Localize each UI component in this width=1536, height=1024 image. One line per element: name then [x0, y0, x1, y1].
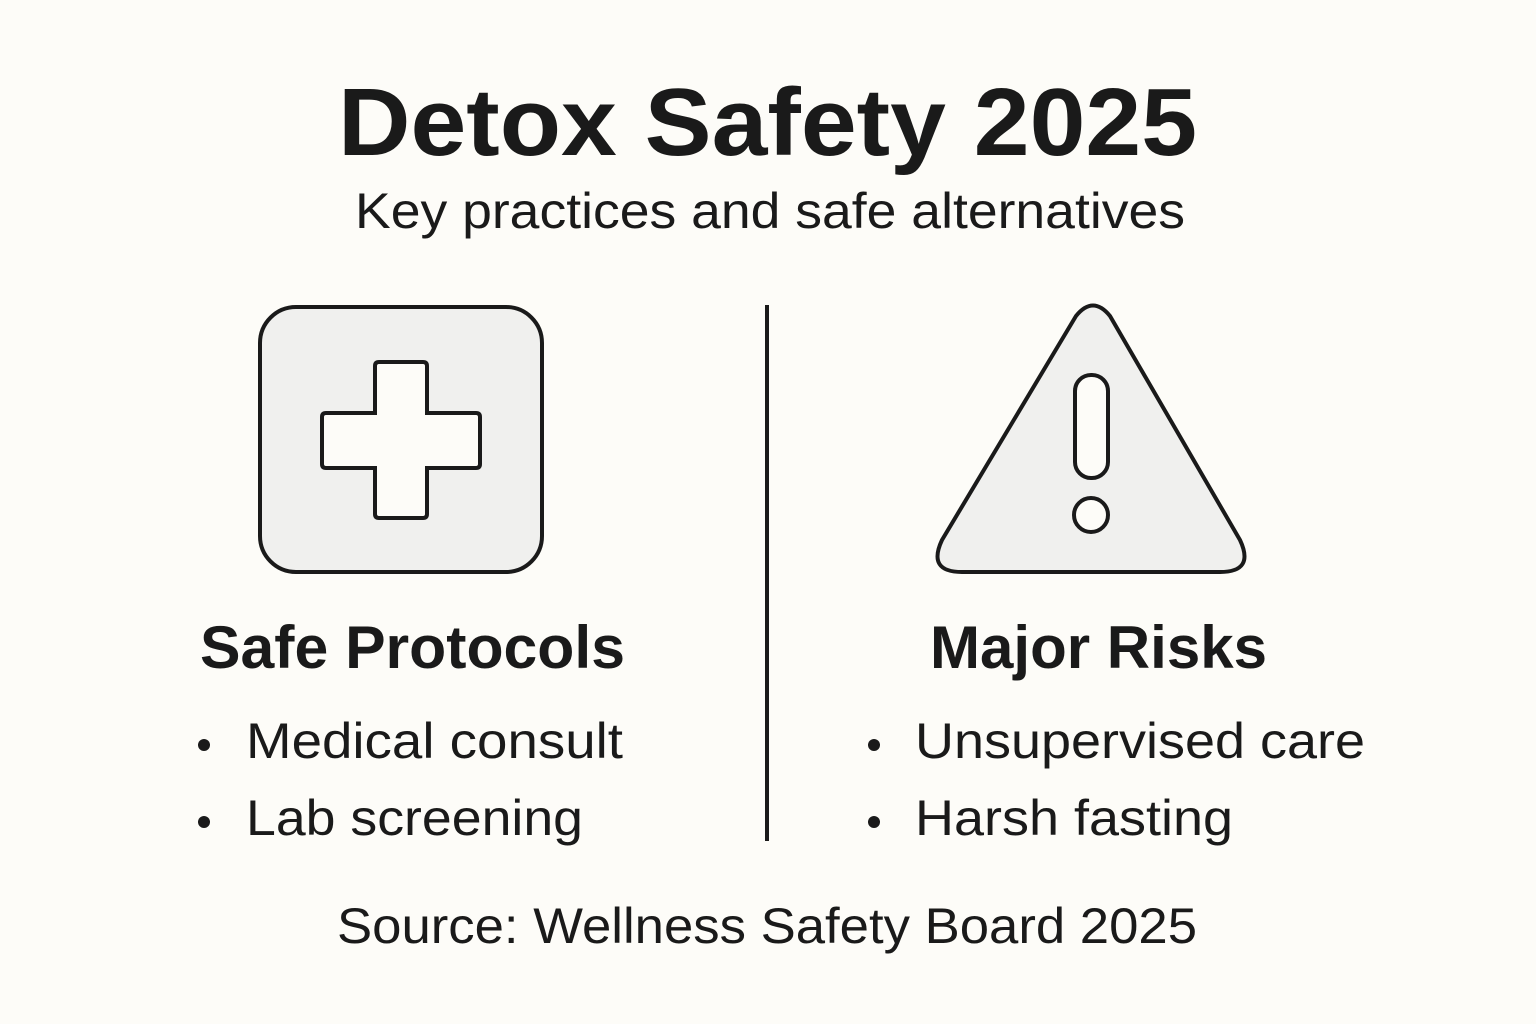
heading: major risks: Major Risks: [930, 614, 1267, 681]
bullet list: safe protocols: Lab screening: [246, 790, 583, 846]
bullet list: safe protocols: Medical consult: [246, 713, 623, 769]
title: Detox Safety 2025: [338, 69, 1197, 176]
heading: safe protocols: Safe Protocols: [200, 614, 625, 681]
bullet list: safe protocols: [198, 713, 623, 846]
icon: medical cross: [260, 307, 542, 572]
panel: major risks: [868, 306, 1365, 846]
bullet list: major risks: [868, 713, 1365, 846]
panel: safe protocols: [198, 307, 625, 846]
icon: warning triangle: [938, 306, 1244, 572]
divider line: [765, 305, 769, 841]
bullet list: major risks: Harsh fasting: [915, 790, 1233, 846]
bullet list: major risks: Unsupervised care: [915, 713, 1365, 769]
source note: Source: Wellness Safety Board 2025: [337, 898, 1197, 954]
subtitle: Key practices and safe alternatives: [355, 183, 1185, 239]
